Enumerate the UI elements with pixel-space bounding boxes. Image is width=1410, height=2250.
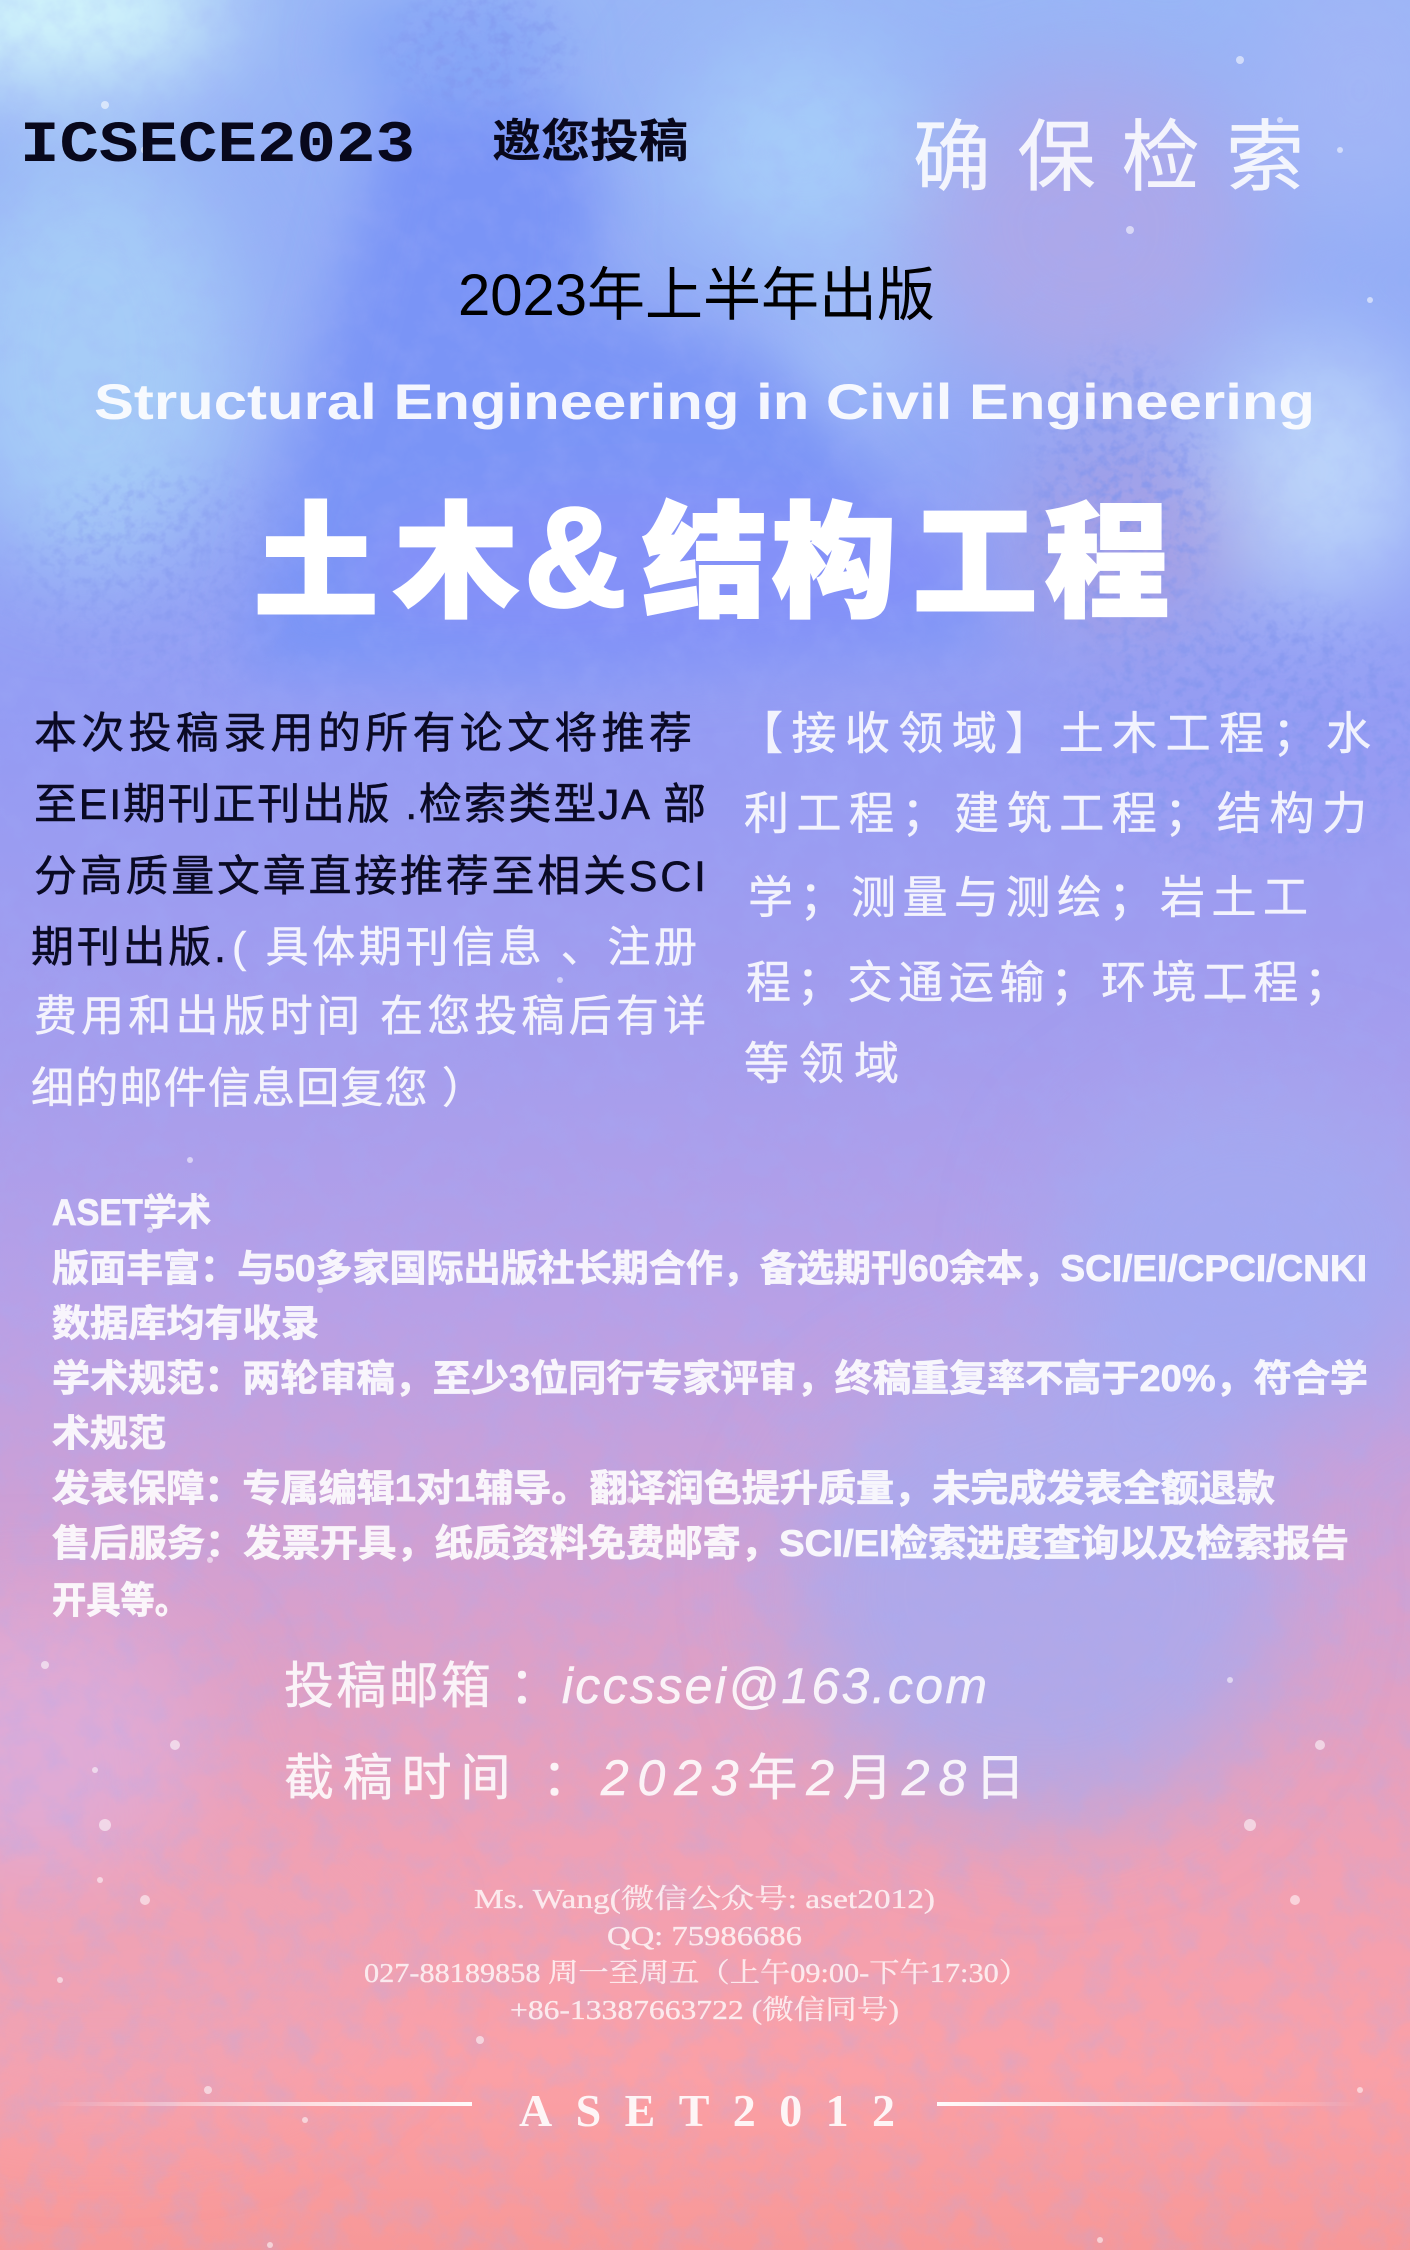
submission email: 投稿邮箱 ：iccssei@163.com [284, 1658, 987, 1714]
line: publishing guarantee: 发表保障：专属编辑1对1辅导。翻译润色提升质量，未完成发表全额退款 [52, 1468, 1275, 1509]
right rule [937, 2102, 1361, 2106]
line 3: 分高质量文章直接推荐至相关SCI [34, 853, 706, 901]
english title: Structural Engineering in Civil Engineering [94, 374, 1315, 430]
line 4 dark part: 期刊出版. [31, 924, 226, 972]
line 2: 至EI期刊正刊出版 .检索类型JA 部 [34, 781, 706, 829]
heading: ASET学术 [52, 1192, 211, 1233]
main title: 结 [643, 495, 767, 633]
publication date heading: 2023年上半年出版 [458, 263, 935, 328]
brand text: ASET2012 [519, 2085, 895, 2136]
line 4: 程；交通运输；环境工程； [746, 957, 1349, 1008]
line: rich layouts: 版面丰富：与50多家国际出版社长期合作，备选期刊60余本，SCI/EI/CPCI/CNKI [52, 1248, 1367, 1289]
line 6: 细的邮件信息回复您 ） [31, 1065, 485, 1113]
line 2: 利工程；建筑工程；结构力 [744, 788, 1367, 839]
header: invitation: 邀您投稿 [492, 115, 688, 167]
line: continuation: 开具等。 [52, 1580, 189, 1621]
phone: 027-88189858 周一至周五（上午09:00-下午17:30） [364, 1958, 1029, 1988]
line 5: 费用和出版时间 在您投稿后有详 [34, 993, 706, 1041]
footer brand with rules [46, 2085, 1361, 2136]
line 5: 等领域 [744, 1038, 899, 1089]
line: continuation: 数据库均有收录 [52, 1303, 319, 1344]
main title: 程 [1045, 495, 1169, 633]
main title: 木 [394, 495, 518, 633]
line 1: 【接收领域】土木工程；水 [738, 708, 1371, 759]
line: after-sales: 售后服务：发票开具，纸质资料免费邮寄，SCI/EI检索进度查询以及检索报告 [52, 1523, 1349, 1564]
main title: & [524, 478, 627, 637]
header: conference name: ICSECE2023 [20, 114, 415, 179]
line 4 light part: ( 具体期刊信息 、注册 [232, 924, 697, 972]
main title: 土 [254, 495, 378, 633]
qq: QQ: 75986686 [607, 1921, 802, 1951]
line 3: 学；测量与测绘；岩土工 [748, 872, 1308, 923]
header: guaranteed indexing: 确保检索 [913, 113, 1304, 201]
text block: accepted fields [738, 708, 1371, 1089]
text block: publication note [31, 710, 706, 1113]
main title: 工 [913, 495, 1037, 633]
line 1: 本次投稿录用的所有论文将推荐 [34, 710, 692, 758]
main title: 构 [772, 495, 896, 633]
contact details [364, 1884, 1029, 2025]
contact name: Ms. Wang(微信公众号: aset2012) [474, 1884, 935, 1914]
submission deadline: 截稿时间 ：2023年2月28日 [284, 1750, 1025, 1806]
text block: ASET academic services [52, 1192, 1368, 1621]
line: continuation: 术规范 [52, 1413, 166, 1454]
line: academic standards: 学术规范：两轮审稿，至少3位同行专家评审，终稿重复率不高于20%，符合学 [52, 1358, 1368, 1399]
left rule [46, 2102, 472, 2106]
mobile: +86-13387663722 (微信同号) [510, 1995, 899, 2025]
